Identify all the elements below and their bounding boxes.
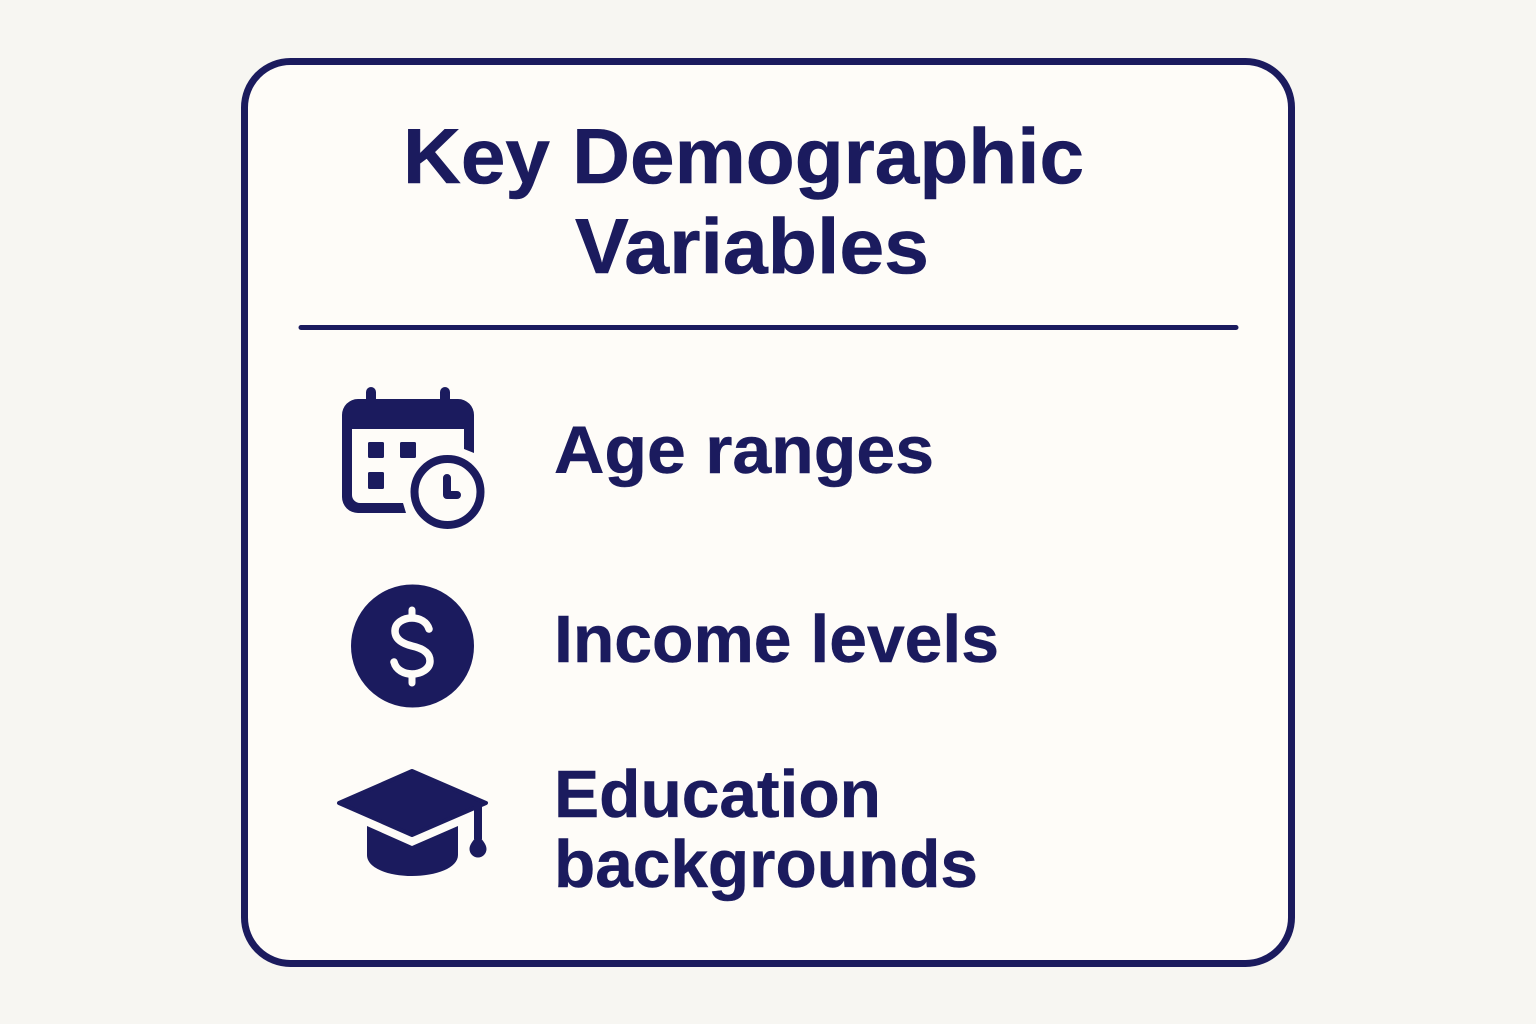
label: education backgrounds bbox=[554, 757, 978, 902]
icon: dollar coin bbox=[351, 584, 474, 708]
label: income levels: Income levels bbox=[554, 602, 999, 677]
title: Variables bbox=[575, 202, 929, 290]
label: age ranges: Age ranges bbox=[554, 413, 934, 488]
label: education backgrounds: backgrounds bbox=[554, 827, 978, 902]
icon: calendar with clock bbox=[342, 387, 480, 525]
panel: demographic variables card bbox=[244, 62, 1292, 964]
title: Key Demographic bbox=[403, 112, 1084, 200]
label: education backgrounds: Education bbox=[554, 757, 881, 832]
title bbox=[403, 112, 1084, 290]
icon: graduation cap bbox=[339, 771, 486, 876]
